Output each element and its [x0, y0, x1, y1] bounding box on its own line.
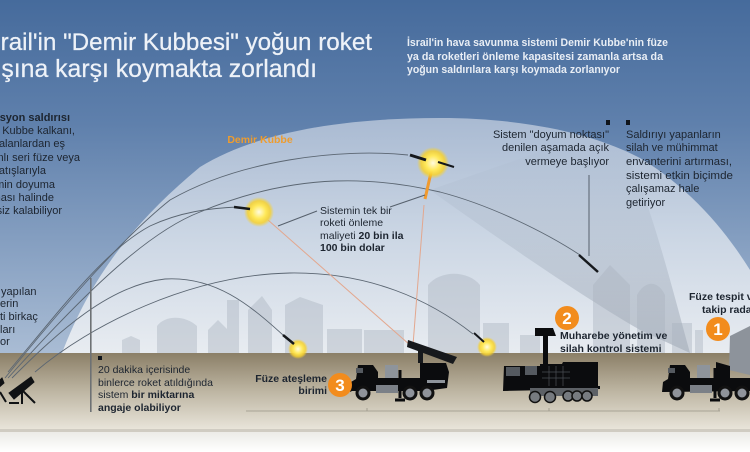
label: command system [560, 330, 668, 355]
text: interception cost [320, 205, 404, 254]
icon: rocket launchers [0, 377, 35, 404]
text: saturation point: denilen aşamada açık [502, 142, 609, 154]
text: clipped left note: ları [0, 324, 15, 336]
text: attackers [626, 120, 733, 209]
intro text [407, 36, 668, 76]
text: interception cost: 100 bin dolar [320, 242, 385, 254]
label: Demir Kubbe: Demir Kubbe [227, 134, 293, 146]
text: clipped left note: erin [0, 298, 18, 310]
burst 3 [288, 339, 308, 359]
text: attackers: Saldırıyı yapanların [626, 129, 721, 141]
label: command system: Muharebe yönetim ve [560, 330, 668, 342]
sky background [0, 0, 750, 353]
text: attackers: çalışamaz hale [626, 183, 699, 195]
badge 1 [706, 317, 730, 341]
badge 3 [328, 373, 352, 397]
ground band [0, 353, 750, 429]
label: radar [689, 291, 750, 316]
intro text: yoğun saldırılara karşı koymada zorlanıyor [407, 64, 621, 76]
interceptor paths [268, 168, 432, 345]
text: 20 minutes: angaje olabiliyor [98, 402, 181, 414]
burst 4 [477, 337, 497, 357]
defense dome [62, 118, 750, 353]
base scale line [246, 408, 720, 411]
text: 20 minutes [98, 356, 213, 414]
text: interception cost: maliyeti 20 bin ila [320, 230, 404, 242]
text: clipped left note [0, 286, 38, 348]
text: attackers: silah ve mühimmat [626, 142, 718, 154]
label: launcher unit: Füze ateşleme [255, 373, 327, 385]
text: saturation point: Sistem "doyum noktası" [493, 129, 609, 141]
text: clipped left note: or [0, 336, 10, 348]
intro text: İsrail'in hava savunma sistemi Demir Kubbe'nin füze [407, 36, 668, 49]
footer shade [0, 432, 750, 452]
text: attackers: envanterini artırması, [626, 156, 732, 168]
badge 1: 1 [713, 320, 723, 339]
text: interception cost: Sistemin tek bir [320, 205, 392, 217]
text: clipped left note: yapılan [1, 286, 36, 298]
vertical callout rule [90, 278, 92, 412]
burst 1 [244, 197, 274, 227]
radar coverage wedge [430, 150, 690, 353]
badge 3: 3 [335, 376, 345, 395]
label: command system: silah kontrol sistemi [560, 343, 662, 355]
text: saturation point: vermeye başlıyor [525, 156, 609, 168]
label: launcher unit [255, 373, 327, 397]
trajectories [5, 153, 580, 378]
text: 20 minutes: 20 dakika içerisinde [98, 364, 190, 376]
intro text: ya da roketleri önleme kapasitesi zamanla artsa da [407, 51, 664, 63]
title [0, 29, 372, 83]
text: saturation attack [0, 112, 81, 217]
text: 20 minutes: binlerce roket atıldığında [98, 377, 213, 389]
leader lines [278, 175, 589, 256]
ground edge strip [0, 429, 750, 432]
unit 3: launcher truck [350, 340, 457, 400]
badge 2 [555, 306, 579, 330]
city skyline [122, 265, 703, 353]
unit 2: command truck [503, 328, 600, 402]
missiles [234, 155, 598, 344]
text: saturation point [493, 120, 610, 168]
text: attackers: sistemi etkin biçimde [626, 170, 733, 182]
burst 2 [417, 147, 449, 179]
text: attackers: getiriyor [626, 197, 665, 209]
text: clipped left note: ti birkaç [0, 311, 38, 323]
text: 20 minutes: sistem bir miktarına [98, 389, 194, 401]
badge 2: 2 [562, 309, 572, 328]
unit 1: radar truck [662, 326, 750, 400]
label: launcher unit: birimi [298, 385, 327, 397]
text: interception cost: roketi önleme [320, 217, 383, 229]
